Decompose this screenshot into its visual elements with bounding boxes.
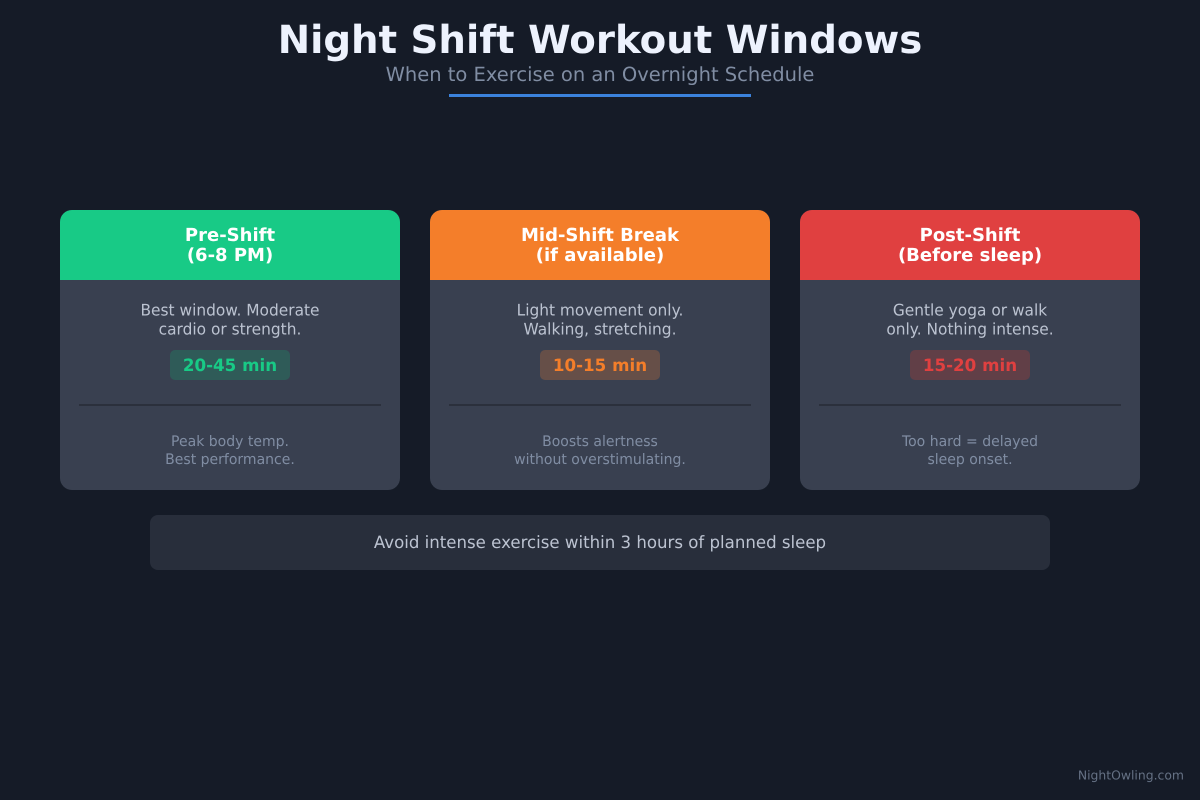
note: mid-shift break bbox=[514, 434, 686, 468]
header: post-shift bbox=[800, 210, 1140, 280]
footer credit: NightOwling.com bbox=[1078, 768, 1184, 782]
description: post-shift: Gentle yoga or walk bbox=[893, 300, 1048, 320]
title underline bbox=[449, 94, 751, 97]
note: post-shift: sleep onset. bbox=[927, 452, 1013, 468]
duration badge: pre-shift bbox=[170, 350, 290, 380]
duration badge: mid-shift break bbox=[540, 350, 660, 380]
duration badge: post-shift bbox=[910, 350, 1030, 380]
description: post-shift: only. Nothing intense. bbox=[886, 320, 1054, 338]
description: pre-shift: cardio or strength. bbox=[159, 320, 301, 338]
duration badge: post-shift: 15-20 min bbox=[923, 356, 1017, 376]
title: Night Shift Workout Windows bbox=[278, 18, 922, 63]
note: pre-shift: Best performance. bbox=[165, 452, 295, 468]
subtitle: When to Exercise on an Overnight Schedule bbox=[386, 63, 814, 86]
description: mid-shift break: Walking, stretching. bbox=[524, 320, 676, 338]
note: mid-shift break: Boosts alertness bbox=[542, 434, 658, 450]
header: mid-shift break: Mid-Shift Break bbox=[521, 225, 680, 246]
panel: pre-shift bbox=[60, 210, 400, 490]
duration badge: pre-shift: 20-45 min bbox=[183, 356, 277, 376]
callout: warning banner: Avoid intense exercise within 3 hours of planned sleep bbox=[374, 533, 826, 553]
note: post-shift bbox=[901, 434, 1038, 468]
note: pre-shift bbox=[165, 434, 295, 468]
panel: post-shift bbox=[800, 210, 1140, 490]
description: post-shift bbox=[886, 300, 1054, 338]
description: pre-shift bbox=[140, 300, 320, 338]
header: mid-shift break: (if available) bbox=[536, 245, 664, 266]
description: mid-shift break bbox=[517, 300, 683, 338]
panel: mid-shift break bbox=[430, 210, 770, 490]
header: pre-shift: Pre-Shift bbox=[185, 225, 275, 246]
note: post-shift: Too hard = delayed bbox=[901, 434, 1038, 450]
callout: warning banner bbox=[150, 515, 1050, 570]
note: pre-shift: Peak body temp. bbox=[171, 434, 289, 450]
header: pre-shift bbox=[60, 210, 400, 280]
header: mid-shift break bbox=[430, 210, 770, 280]
note: mid-shift break: without overstimulating. bbox=[514, 452, 686, 468]
description: mid-shift break: Light movement only. bbox=[517, 300, 683, 320]
description: pre-shift: Best window. Moderate bbox=[140, 300, 320, 320]
header: post-shift: Post-Shift bbox=[920, 225, 1021, 246]
header: pre-shift: (6-8 PM) bbox=[187, 245, 273, 266]
header: post-shift: (Before sleep) bbox=[898, 245, 1042, 266]
duration badge: mid-shift break: 10-15 min bbox=[553, 356, 647, 376]
